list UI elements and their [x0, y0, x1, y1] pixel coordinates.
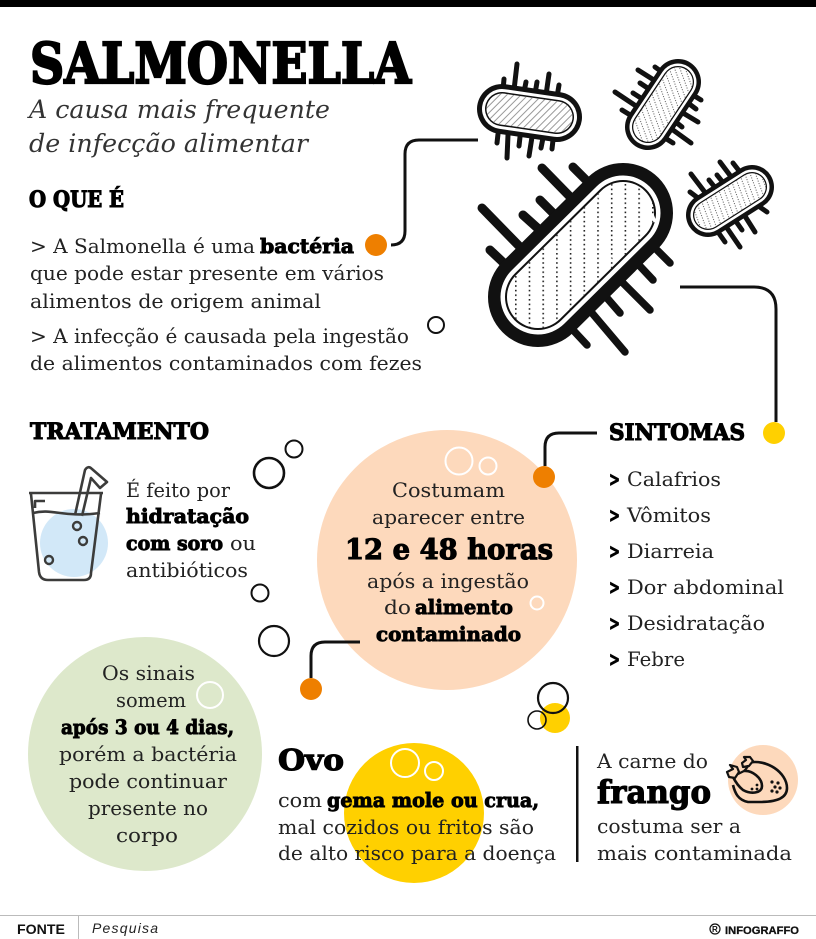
text block: tratamento: antibióticos [126, 558, 248, 582]
list: sintomas: > [609, 647, 620, 671]
panel: green circle: após 3 ou 4 dias, [61, 715, 234, 739]
panel: ovo: Ovo [278, 743, 344, 777]
heading: o que é: O QUE É [29, 186, 124, 213]
panel: time circle [317, 430, 577, 690]
text block: tratamento: com soro [126, 531, 223, 555]
connector: bacteria to sintomas [680, 287, 785, 444]
list: sintomas: Diarreia [627, 539, 714, 563]
decorative bubbles near egg [528, 683, 570, 733]
panel: time circle: aparecer entre [372, 505, 525, 529]
panel: time circle: alimento [415, 595, 513, 619]
decorative bubbles [252, 440, 302, 656]
panel: time circle: do [384, 595, 411, 619]
text block: o que é: alimentos de origem animal [30, 289, 321, 313]
footer: R [712, 925, 718, 934]
panel: ovo: gema mole ou crua, [327, 788, 539, 812]
list: sintomas: Desidratação [627, 611, 765, 635]
subtitle: de infecção alimentar [29, 129, 310, 158]
text block: o que é: que pode estar presente em vários [30, 261, 384, 285]
icon: main bacterium [482, 167, 670, 352]
panel: frango: frango [597, 773, 711, 811]
list: sintomas: Vômitos [626, 503, 711, 527]
icon: small bacterium top left [497, 64, 559, 158]
footer [0, 915, 816, 939]
panel: green circle: Os sinais [102, 661, 195, 685]
circle: outline bubble top [428, 317, 444, 333]
panel: frango: A carne do [596, 749, 708, 773]
icon: small bacterium right [690, 162, 767, 247]
heading: sintomas: SINTOMAS [609, 420, 745, 446]
panel: time circle: após a ingestão [367, 569, 529, 593]
list: sintomas: Calafrios [627, 467, 721, 491]
panel: time circle: 12 e 48 horas [345, 533, 553, 566]
connector: sintomas to time circle [533, 433, 597, 488]
icon: glass of water [29, 467, 108, 580]
panel: green circle: pode continuar [69, 769, 227, 793]
panel: time circle: Costumam [392, 478, 505, 502]
subtitle [27, 95, 330, 158]
panel: green circle: presente no [88, 796, 208, 820]
text block: o que é: de alimentos contaminados com fezes [30, 351, 422, 375]
list: sintomas: Dor abdominal [627, 575, 784, 599]
panel: green circle: somem [116, 688, 186, 712]
text block: o que é: bactéria [260, 234, 354, 258]
text block: o que é: > A infecção é causada pela ingestão [30, 324, 409, 348]
text block: o que é: > A Salmonella é uma [30, 234, 255, 258]
panel: green circle [28, 637, 262, 871]
list: sintomas: > [609, 503, 620, 527]
panel: frango: mais contaminada [597, 841, 792, 865]
text block: tratamento [126, 478, 256, 582]
list: sintomas [609, 467, 784, 671]
list: sintomas: > [609, 611, 620, 635]
panel: green circle: corpo [116, 823, 178, 847]
panel: frango: costuma ser a [597, 814, 741, 838]
footer: INFOGRAFFO [725, 925, 799, 937]
panel: ovo [278, 743, 556, 883]
list: sintomas: > [609, 467, 620, 491]
subtitle: A causa mais frequente [27, 95, 330, 124]
heading: tratamento: TRATAMENTO [30, 419, 209, 445]
icon: small bacterium top right [615, 67, 701, 143]
panel: ovo: mal cozidos ou fritos são [278, 815, 534, 839]
panel: ovo: com [278, 788, 322, 812]
connector: bacteria to text [365, 140, 478, 256]
footer: Pesquisa [92, 920, 158, 936]
connector: time circle to green circle [300, 642, 360, 700]
list: sintomas: Febre [627, 647, 685, 671]
list: sintomas: > [609, 539, 620, 563]
text block: tratamento: hidratação [126, 504, 249, 528]
text block: o que é [30, 234, 422, 375]
panel: ovo: de alto risco para a doença [278, 841, 556, 865]
footer: FONTE [17, 921, 65, 937]
panel: frango [596, 749, 792, 865]
panel: green circle: porém a bactéria [59, 742, 237, 766]
title: SALMONELLA [30, 31, 412, 97]
icon: chicken [727, 745, 798, 815]
text block: tratamento: ou [230, 531, 256, 555]
text block: tratamento: É feito por [126, 478, 230, 502]
list: sintomas: > [609, 575, 620, 599]
panel: time circle: contaminado [376, 622, 521, 646]
